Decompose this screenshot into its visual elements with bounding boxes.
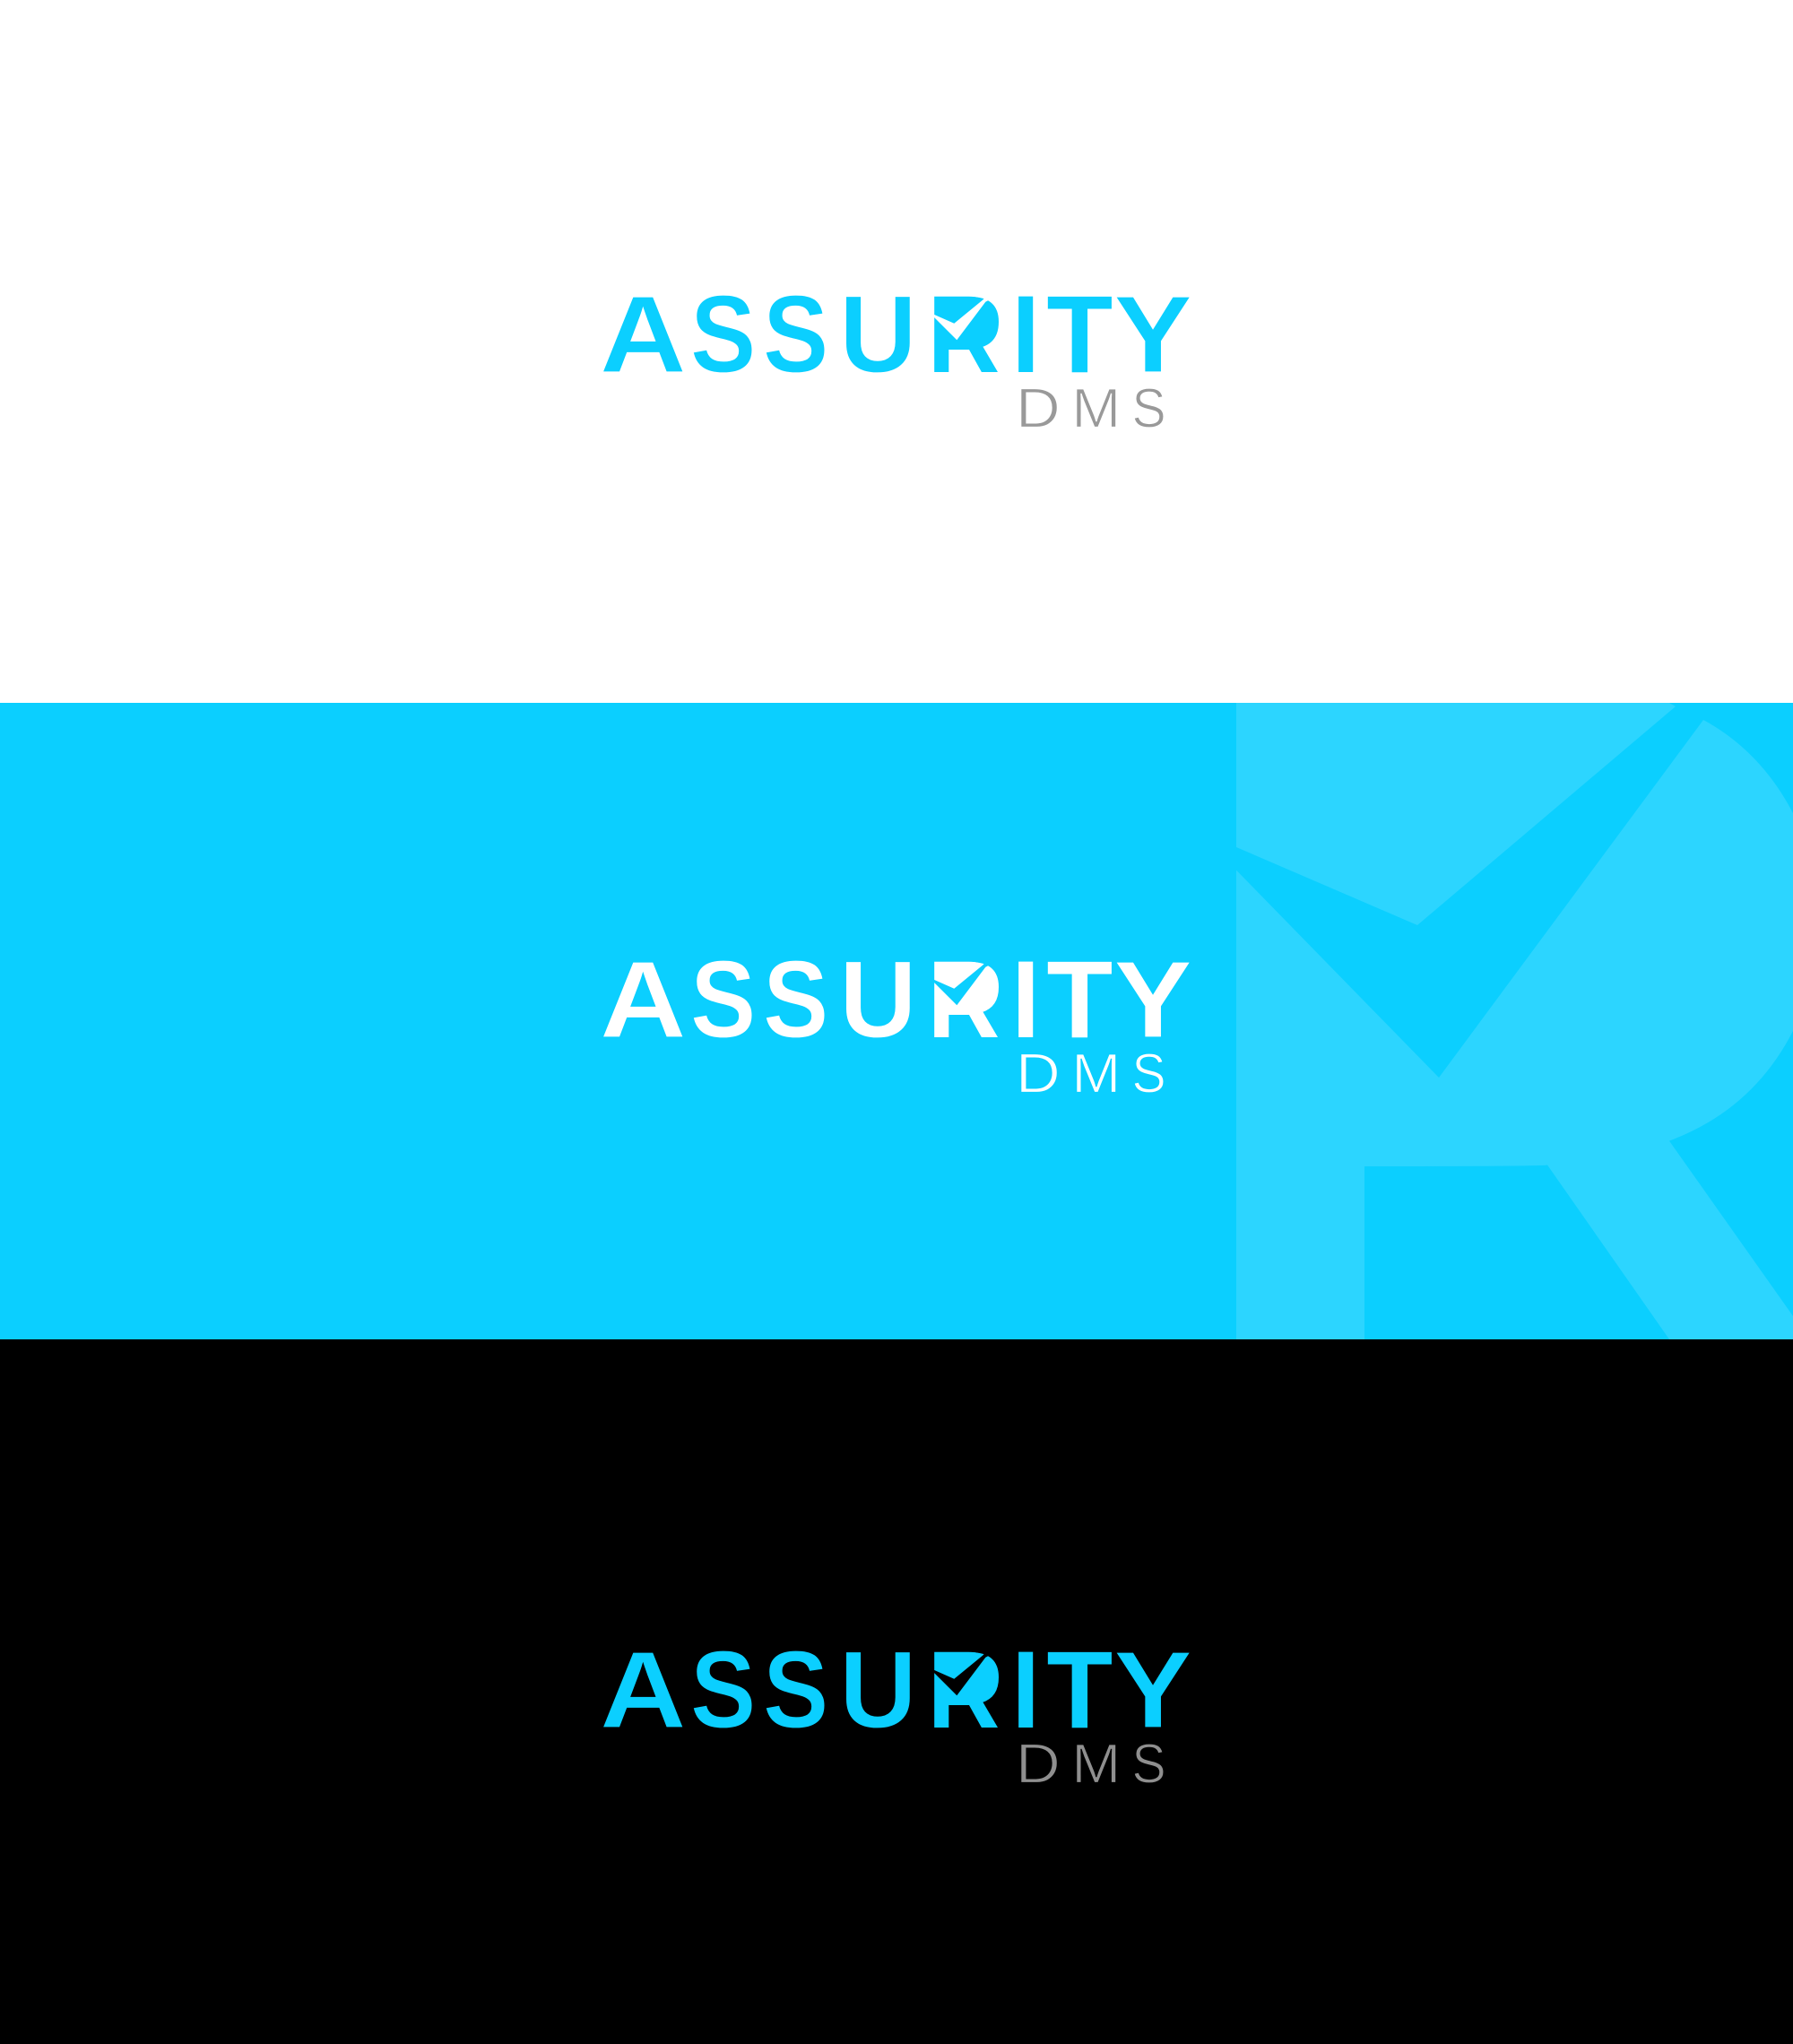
wordmark: ASSURITY white: S — [690, 939, 756, 1061]
tagline: DMS grey: S — [1131, 1732, 1166, 1795]
logo on black — [600, 1628, 1192, 1795]
icon: check mark cut into white R — [932, 959, 995, 1005]
wordmark: ASSURITY white: U — [839, 939, 917, 1061]
wordmark: ASSURITY: A — [600, 274, 687, 396]
wordmark: ASSURITY white: T — [1047, 938, 1113, 1061]
wordmark: ASSURITY white: Y — [1113, 938, 1192, 1061]
wordmark: ASSURITY white — [600, 938, 1192, 1061]
panel: cyan background — [0, 703, 1793, 1339]
tagline: DMS: S — [1131, 377, 1166, 439]
tagline: DMS grey: M — [1071, 1732, 1121, 1795]
wordmark: ASSURITY: S — [763, 273, 828, 395]
wordmark: ASSURITY cyan: Y — [1113, 1628, 1192, 1751]
wordmark: ASSURITY white: I — [1012, 938, 1040, 1061]
wordmark: ASSURITY cyan — [600, 1628, 1192, 1752]
tagline: DMS white — [1016, 1041, 1166, 1104]
tagline: DMS grey: D — [1016, 1731, 1061, 1795]
panel: white background — [0, 0, 1793, 703]
tagline: DMS: M — [1071, 377, 1121, 439]
wordmark: ASSURITY cyan: I — [1012, 1628, 1040, 1751]
wordmark: ASSURITY cyan: T — [1047, 1628, 1113, 1751]
wordmark: ASSURITY: U — [839, 273, 917, 395]
watermark: oversized R with check mark — [1236, 703, 1793, 1339]
wordmark: ASSURITY white: R — [928, 938, 1000, 1061]
wordmark: ASSURITY cyan: S — [690, 1629, 756, 1751]
wordmark: ASSURITY: S — [690, 273, 756, 395]
wordmark: ASSURITY: Y — [1113, 273, 1192, 395]
tagline: DMS grey — [1016, 1731, 1166, 1795]
icon: check mark cut into cyan R — [932, 1650, 995, 1695]
tagline: DMS — [1016, 376, 1166, 439]
wordmark: ASSURITY — [600, 273, 1192, 396]
tagline: DMS white: M — [1071, 1042, 1121, 1104]
wordmark: ASSURITY cyan: U — [839, 1629, 917, 1751]
wordmark: ASSURITY white: S — [763, 939, 828, 1061]
wordmark: ASSURITY cyan: S — [763, 1629, 828, 1751]
wordmark: ASSURITY cyan: A — [600, 1630, 687, 1752]
tagline: DMS: D — [1016, 376, 1061, 439]
wordmark: ASSURITY cyan: R — [928, 1628, 1000, 1751]
panel: black background — [0, 1339, 1793, 2044]
wordmark: ASSURITY: I — [1012, 273, 1040, 395]
wordmark: ASSURITY: T — [1047, 273, 1113, 395]
wordmark: ASSURITY: R — [928, 273, 1000, 395]
tagline: DMS white: S — [1131, 1042, 1166, 1104]
icon: check mark cut into R — [932, 294, 995, 340]
tagline: DMS white: D — [1016, 1041, 1061, 1104]
wordmark: ASSURITY white: A — [600, 940, 687, 1061]
logo on cyan — [600, 938, 1192, 1104]
logo on white — [600, 273, 1192, 439]
